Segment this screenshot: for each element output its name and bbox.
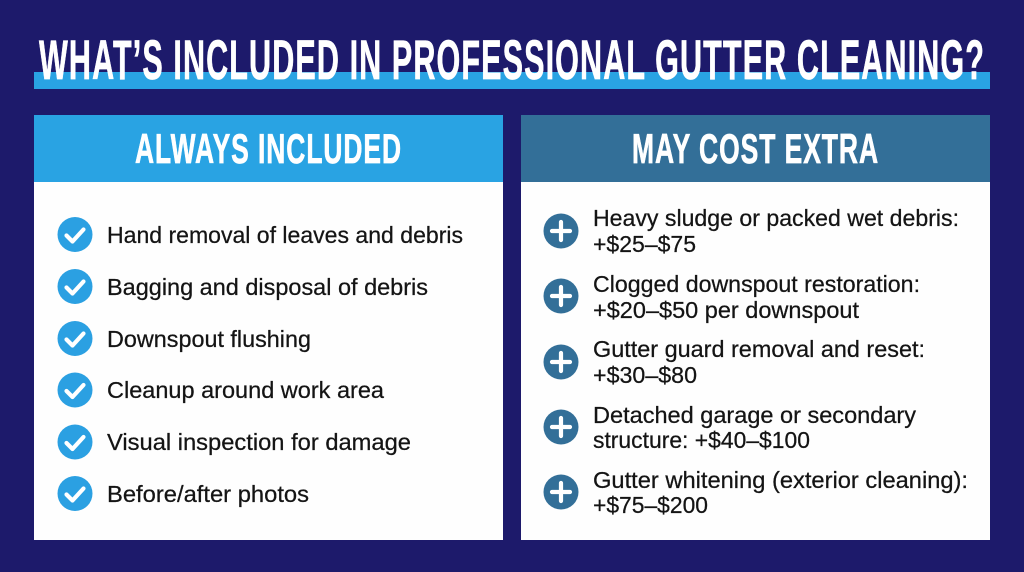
item: cleanup	[58, 372, 384, 408]
item: gutter guard: Gutter guard removal and reset:	[593, 336, 925, 362]
item: clogged downspout: Clogged downspout restoration:	[593, 271, 920, 297]
item: cleanup: Cleanup around work area	[107, 377, 384, 403]
item: bagging and disposal: Bagging and disposal of debris	[107, 274, 428, 300]
item: before/after photos: Before/after photos	[107, 481, 309, 507]
item: hand removal: Hand removal of leaves and debris	[107, 222, 463, 248]
item: detached garage: Detached garage or secondary	[593, 402, 917, 428]
item: before/after photos	[58, 476, 309, 511]
item: clogged downspout: +$20–$50 per downspout	[593, 297, 860, 323]
item: clogged downspout	[544, 271, 920, 323]
panel header: may cost extra	[521, 115, 990, 182]
panel header: always included: ALWAYS INCLUDED	[135, 125, 402, 172]
item: bagging and disposal	[58, 269, 428, 304]
item: detached garage: structure: +$40–$100	[593, 427, 810, 453]
panel header: may cost extra: MAY COST EXTRA	[632, 125, 879, 172]
item: gutter whitening	[544, 467, 968, 518]
item: gutter whitening: Gutter whitening (exterior cleaning):	[593, 467, 968, 493]
item: gutter whitening: +$75–$200	[593, 492, 708, 518]
item: gutter guard	[544, 336, 925, 388]
item: heavy sludge: +$25–$75	[593, 231, 696, 257]
item: detached garage	[544, 402, 917, 453]
item: hand removal	[58, 217, 463, 252]
panel: may cost extra	[521, 115, 990, 540]
item: downspout flushing: Downspout flushing	[107, 326, 311, 352]
item: heavy sludge	[544, 205, 959, 257]
item: gutter guard: +$30–$80	[593, 362, 697, 388]
item: downspout flushing	[58, 321, 311, 356]
panel: always included	[34, 115, 503, 540]
item: visual inspection	[58, 424, 411, 460]
item: visual inspection: Visual inspection for damage	[107, 429, 411, 455]
panel header: always included	[34, 115, 503, 182]
item: heavy sludge: Heavy sludge or packed wet debris:	[593, 205, 959, 231]
